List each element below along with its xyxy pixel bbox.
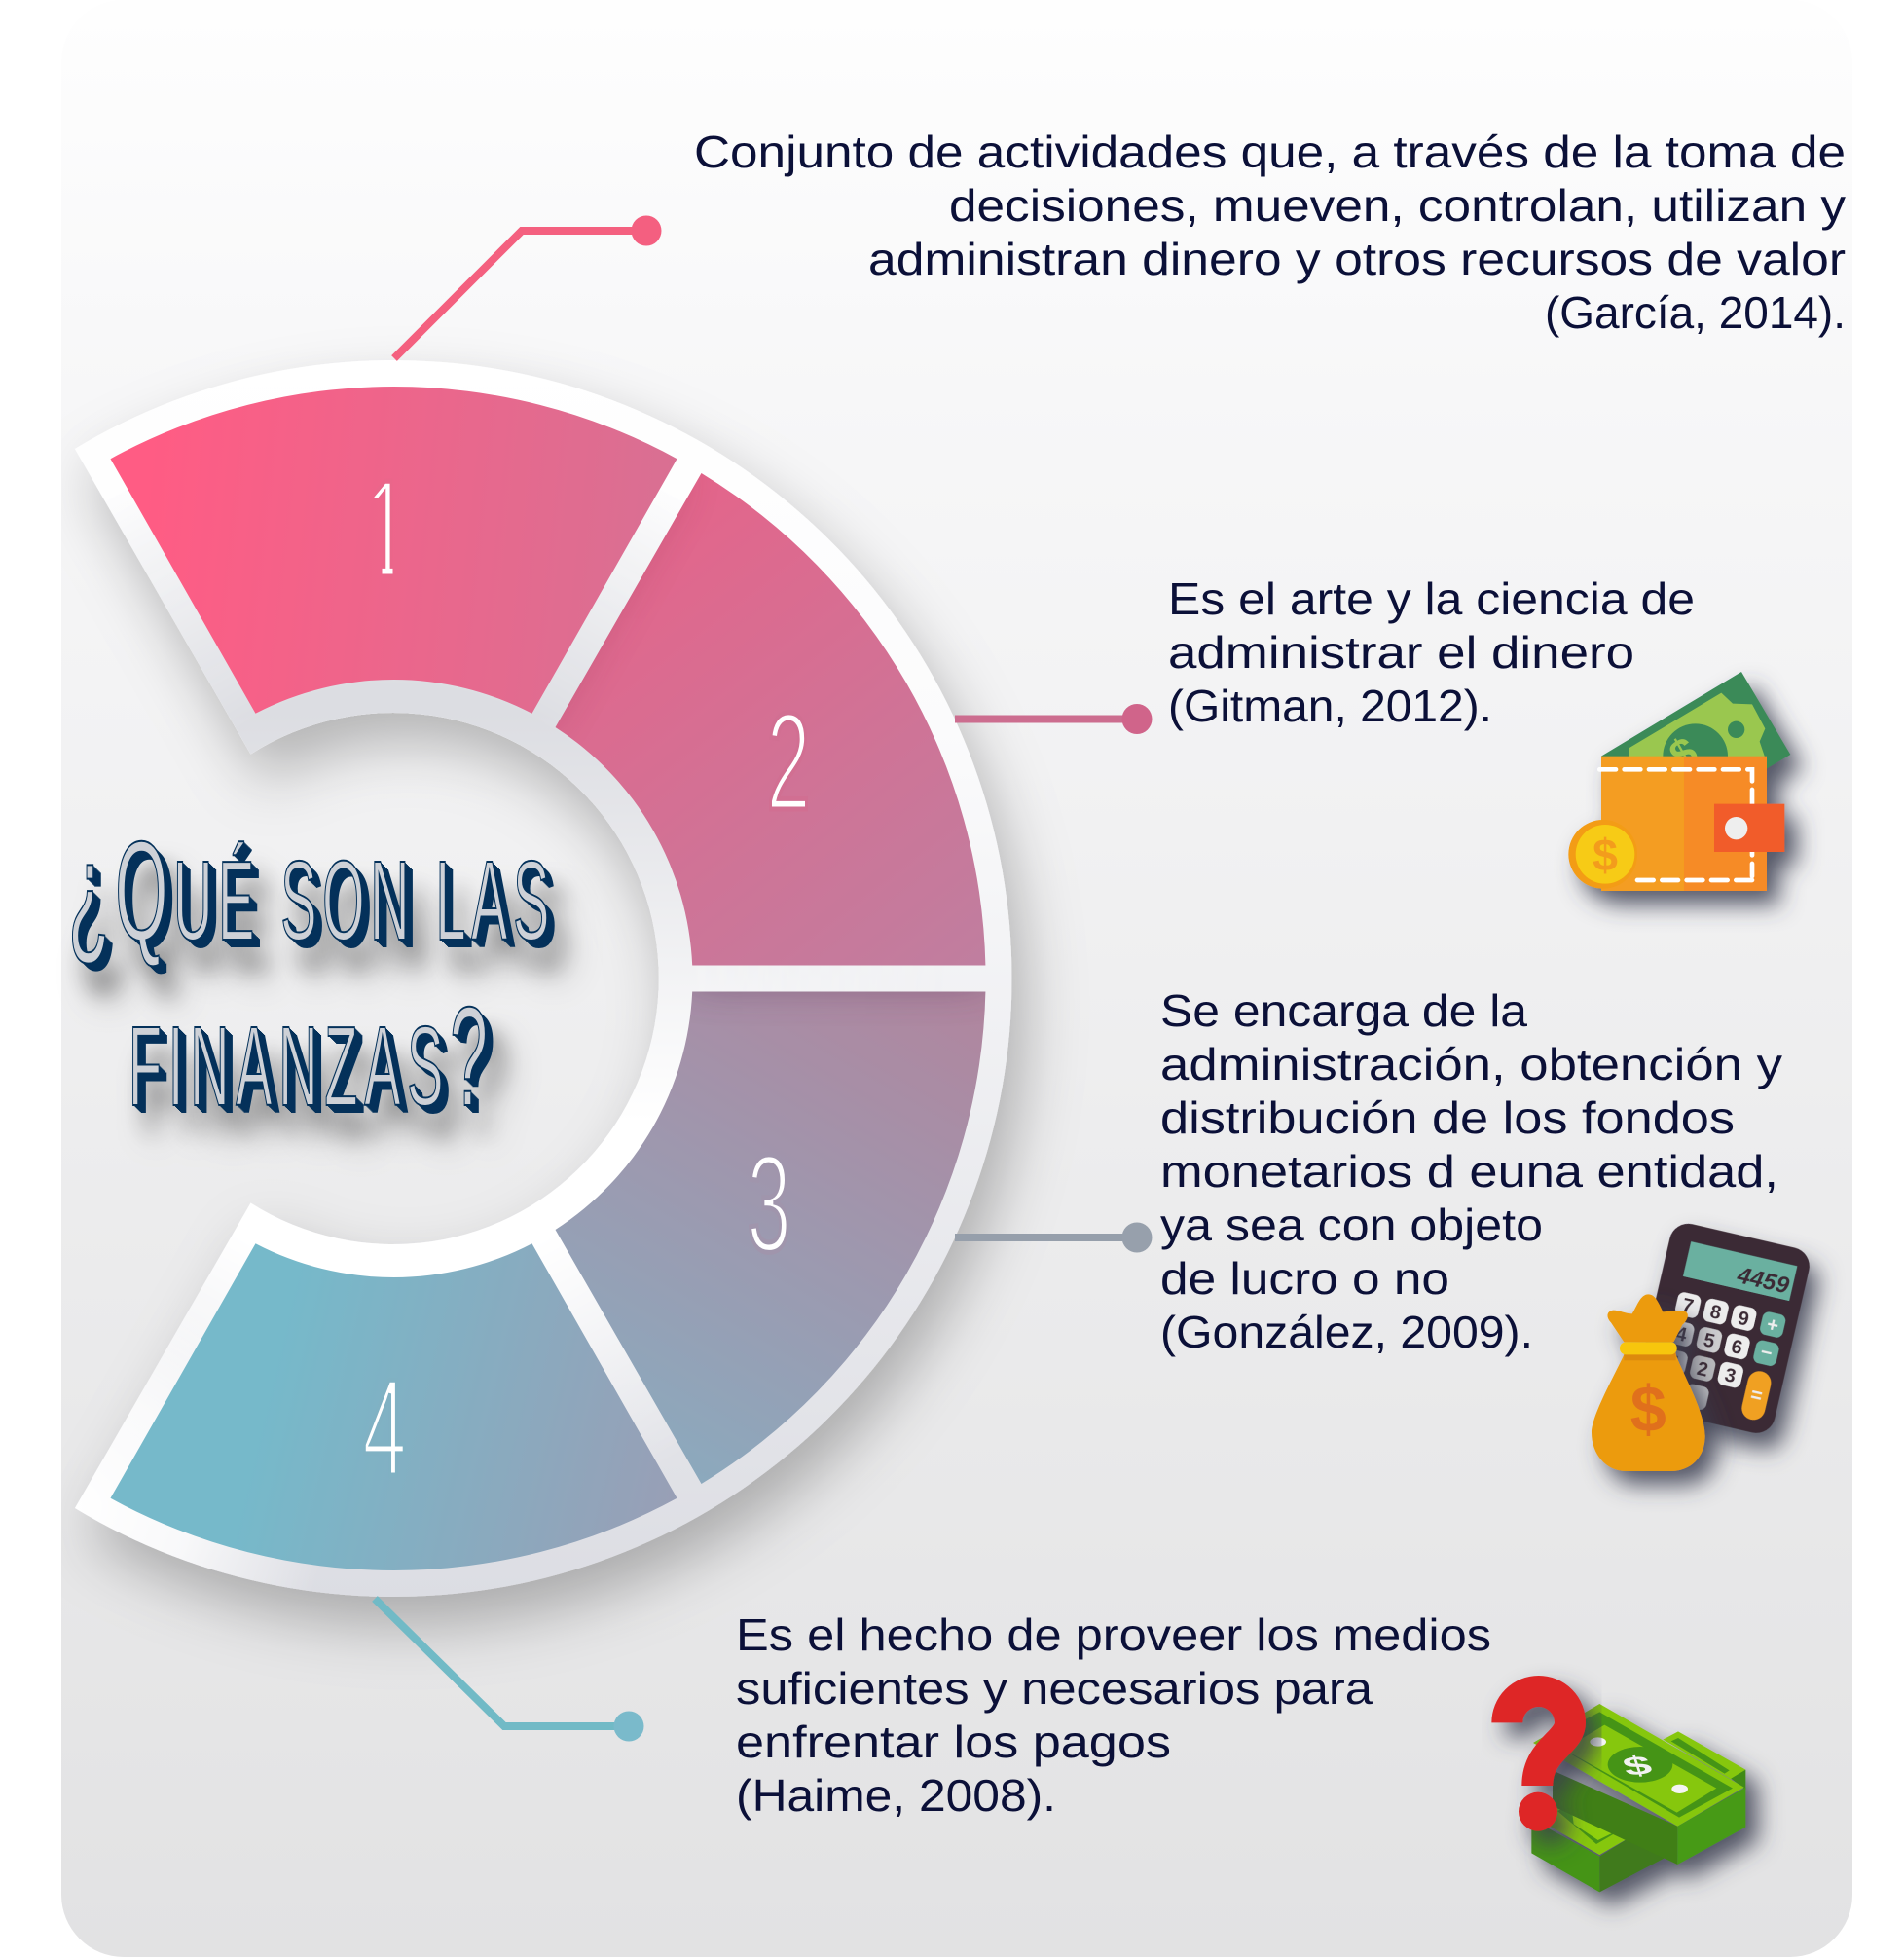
connector 4 [375, 1599, 644, 1741]
text block 4 [736, 1609, 1491, 1821]
calculator: 3 [1723, 1364, 1738, 1387]
bills: $ [1619, 1750, 1656, 1782]
calculator: 4459 [1734, 1262, 1792, 1300]
donut chart [75, 360, 1011, 1597]
ring backing [75, 360, 1011, 1597]
calculator: 6 [1729, 1336, 1744, 1359]
money bag [1592, 1294, 1705, 1471]
text block 2: Es el arte y la ciencia de [1168, 573, 1695, 624]
icon: wallet: $ [1593, 830, 1618, 880]
calculator: + [1765, 1313, 1780, 1337]
text block 4: suficientes y necesarios para [736, 1663, 1373, 1714]
calculator: 4 [1673, 1323, 1689, 1347]
text block 1: Conjunto de actividades que, a través de la toma de [694, 127, 1846, 177]
text block 1 [694, 127, 1846, 338]
connector 2 [955, 704, 1153, 734]
calculator: − [1758, 1342, 1775, 1365]
text block 2 [1168, 573, 1695, 731]
segment 1 [111, 387, 677, 714]
title line 2: FINANZAS? [128, 978, 494, 1135]
icon: calculator and money bag [1592, 1220, 1813, 1471]
question mark [1507, 1691, 1570, 1831]
text block 4: Es el hecho de proveer los medios [736, 1609, 1491, 1660]
text block 3: monetarios d euna entidad, [1160, 1146, 1778, 1197]
connector 1 [394, 216, 662, 358]
segment 3 cast shadow [692, 991, 985, 1003]
text block 1: administran dinero y otros recursos de valor [868, 234, 1846, 284]
calculator: = [1748, 1385, 1764, 1408]
calculator: 2 [1695, 1358, 1710, 1382]
calculator: 1 [1666, 1351, 1682, 1375]
connector 3 [955, 1223, 1153, 1252]
number 1: 1 [364, 452, 409, 607]
title line 1: ¿QUÉ SON LAS [68, 812, 555, 970]
text block 2: administrar el dinero [1168, 627, 1634, 678]
calculator [1631, 1220, 1813, 1437]
calculator: 5 [1702, 1330, 1717, 1353]
icon: wallet: $ [1662, 728, 1705, 780]
icon: money stacks and question mark [1507, 1691, 1745, 1892]
number 2: 2 [767, 684, 811, 839]
calculator: 0 [1661, 1380, 1675, 1403]
calculator: 7 [1680, 1295, 1696, 1318]
segment 2 [555, 473, 985, 966]
calculator: 9 [1736, 1308, 1751, 1331]
text block 1: (García, 2014). [1545, 287, 1846, 338]
text block 4: enfrentar los pagos [736, 1717, 1171, 1767]
text block 3 [1160, 985, 1782, 1357]
segment 3 [555, 991, 985, 1484]
text block 3: de lucro o no [1160, 1253, 1449, 1304]
text block 4: (Haime, 2008). [736, 1770, 1056, 1821]
text block 2: (Gitman, 2012). [1168, 681, 1492, 731]
segment 4 [111, 1243, 677, 1570]
text block 3: (González, 2009). [1160, 1307, 1533, 1357]
text block 3: administración, obtención y [1160, 1039, 1782, 1089]
number 4: 4 [362, 1350, 407, 1505]
number 3: 3 [748, 1126, 791, 1281]
icon: wallet [1568, 672, 1790, 891]
segment 2 cast shadow [558, 502, 685, 723]
text block 3: Se encarga de la [1160, 985, 1527, 1036]
calculator: 8 [1708, 1301, 1723, 1324]
money bag: $ [1630, 1374, 1666, 1446]
text block 1: decisiones, mueven, controlan, utilizan y [949, 180, 1846, 231]
bills [1531, 1704, 1745, 1892]
text block 3: ya sea con objeto [1160, 1200, 1543, 1250]
text block 3: distribución de los fondos [1160, 1092, 1735, 1143]
